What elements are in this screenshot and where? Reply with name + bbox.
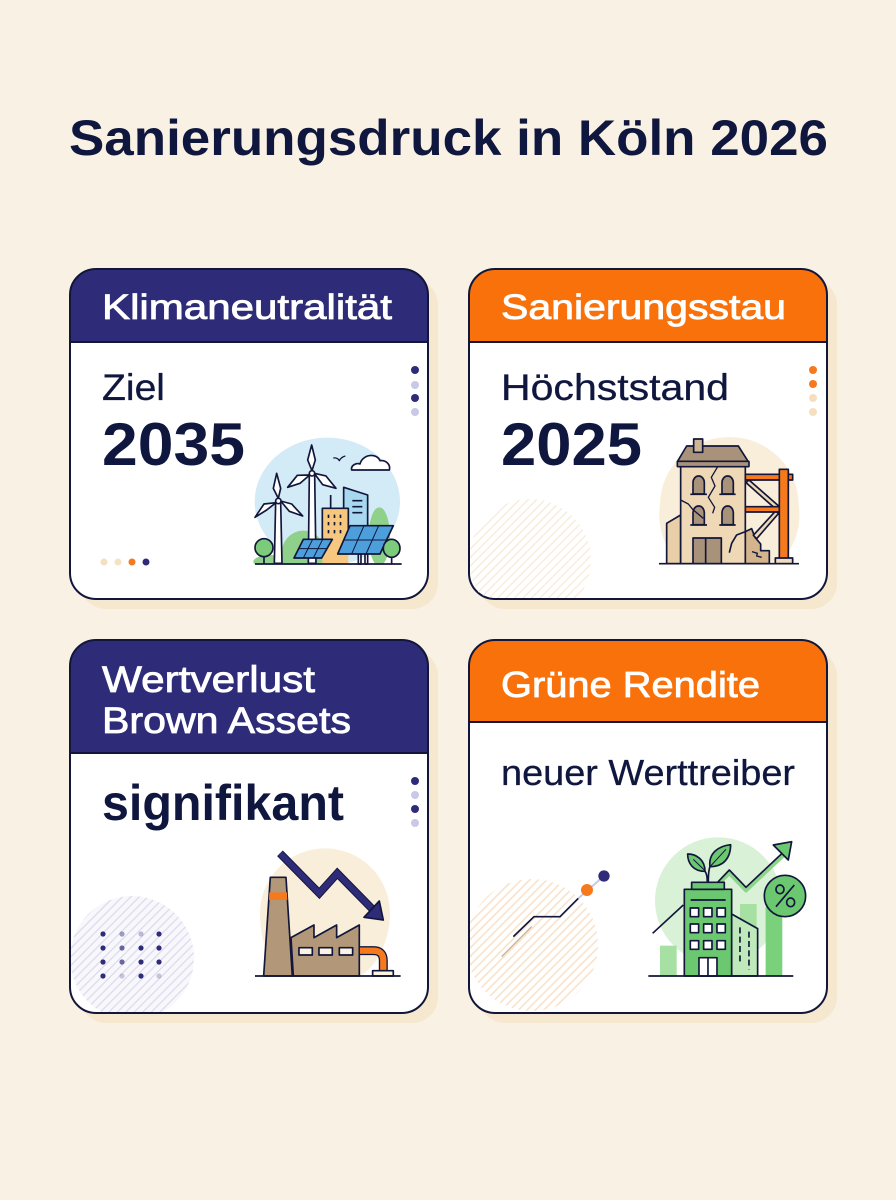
line chart fragment	[502, 870, 610, 957]
dots: vertical	[411, 366, 419, 416]
value: 2025: 2025	[501, 411, 642, 478]
hatch	[466, 879, 598, 1011]
heading: Wertverlust Brown Assets: Wertverlust	[102, 659, 316, 700]
icon: wind turbines, solar panels and buildings	[253, 438, 402, 576]
value: signifikant: signifikant	[102, 775, 344, 831]
icon: green building with rising arrow	[648, 837, 806, 976]
label: Ziel: Ziel	[102, 367, 165, 408]
heading: Klimaneutralität: Klimaneutralität	[102, 288, 392, 327]
panel: Klimaneutralität	[70, 269, 438, 609]
dots: vertical	[411, 777, 419, 827]
dots: grid	[100, 931, 162, 979]
hatch	[470, 499, 591, 598]
icon: factory with falling arrow	[255, 848, 401, 976]
hatch	[70, 896, 194, 1020]
panel: Sanierungsstau	[469, 269, 837, 621]
heading: Wertverlust Brown Assets: Brown Assets	[102, 700, 351, 741]
icon: damaged building with steel support	[659, 437, 799, 564]
panel: Grüne Rendite	[466, 640, 837, 1023]
dots: vertical	[809, 366, 817, 416]
panel: Wertverlust Brown Assets	[70, 640, 438, 1023]
title: Sanierungsdruck in Köln 2026	[69, 110, 828, 166]
dots: horizontal	[100, 558, 150, 566]
heading: Sanierungsstau: Sanierungsstau	[501, 288, 786, 327]
value: 2035: 2035	[102, 411, 245, 478]
label: neuer Werttreiber: neuer Werttreiber	[501, 752, 795, 793]
label: Höchststand: Höchststand	[501, 367, 729, 408]
heading: Grüne Rendite: Grüne Rendite	[501, 664, 760, 705]
heading: Wertverlust Brown Assets	[102, 659, 351, 741]
